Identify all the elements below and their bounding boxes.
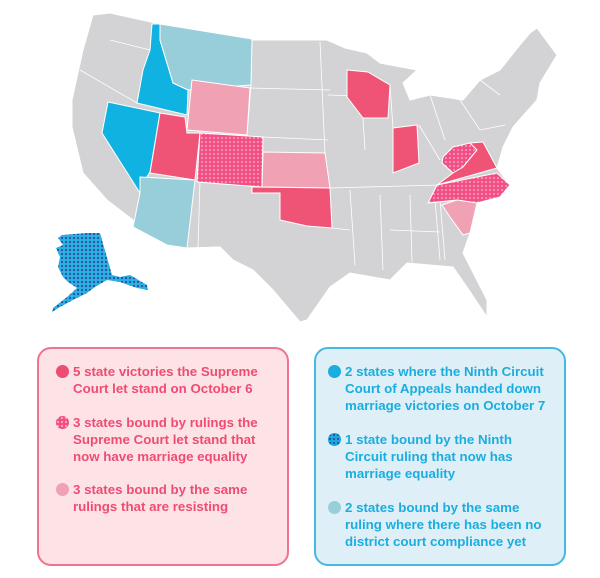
state: north carolina	[428, 173, 510, 203]
legend item: 2 states ninth circuit: 2 states where the Ninth Circuit	[345, 364, 544, 379]
state: west virginia	[442, 143, 477, 173]
state: wyoming	[187, 80, 250, 135]
legend item: 1 state marriage equality	[328, 432, 513, 481]
legend item: 2 states no compliance: 2 states bound by the same	[345, 500, 519, 515]
legend item: 2 states no compliance: ruling where there has been no	[345, 517, 542, 532]
legend item: 5 state victories: Court let stand on October 6	[73, 381, 253, 396]
state: nevada	[102, 102, 160, 193]
state: idaho	[137, 24, 188, 115]
legend item: 2 states ninth circuit: Court of Appeals handed down	[345, 381, 541, 396]
legend item: 5 state victories	[56, 364, 258, 396]
legend item: 3 states with marriage equality: Supreme Court let stand that	[73, 432, 255, 447]
state: arizona	[133, 177, 195, 248]
legend item: 5 state victories: 5 state victories the Supreme	[73, 364, 258, 379]
legend item: 1 state marriage equality: Circuit ruling that now has	[345, 449, 513, 464]
panel: supreme court legend	[37, 347, 289, 566]
state: wisconsin	[347, 70, 390, 118]
state: oklahoma	[252, 187, 332, 228]
panel: ninth circuit legend	[314, 347, 566, 566]
legend item: 2 states no compliance: district court compliance yet	[345, 534, 526, 549]
legend item: 2 states ninth circuit: marriage victories on October 7	[345, 398, 545, 413]
map	[52, 14, 556, 322]
state: colorado	[197, 133, 263, 187]
us base	[72, 13, 557, 322]
legend item: 1 state marriage equality: marriage equality	[345, 466, 455, 481]
legend item: 3 states with marriage equality: 3 states bound by rulings the	[73, 415, 258, 430]
legend item: 3 states resisting: 3 states bound by the same	[73, 482, 247, 497]
state: utah	[150, 113, 200, 180]
legend item: 3 states resisting	[56, 482, 247, 514]
state: kansas	[262, 152, 330, 188]
legend item: 3 states with marriage equality	[56, 415, 258, 464]
state: virginia	[437, 142, 497, 185]
legend item: 3 states with marriage equality: now have marriage equality	[73, 449, 247, 464]
state: alaska	[52, 233, 148, 312]
state: indiana	[393, 125, 419, 173]
legend item: 2 states ninth circuit	[328, 364, 545, 413]
state: montana	[160, 24, 252, 90]
state: south carolina	[442, 200, 477, 235]
legend item: 1 state marriage equality: 1 state bound by the Ninth	[345, 432, 512, 447]
legend item: 2 states no compliance	[328, 500, 542, 549]
legend item: 3 states resisting: rulings that are resisting	[73, 499, 228, 514]
